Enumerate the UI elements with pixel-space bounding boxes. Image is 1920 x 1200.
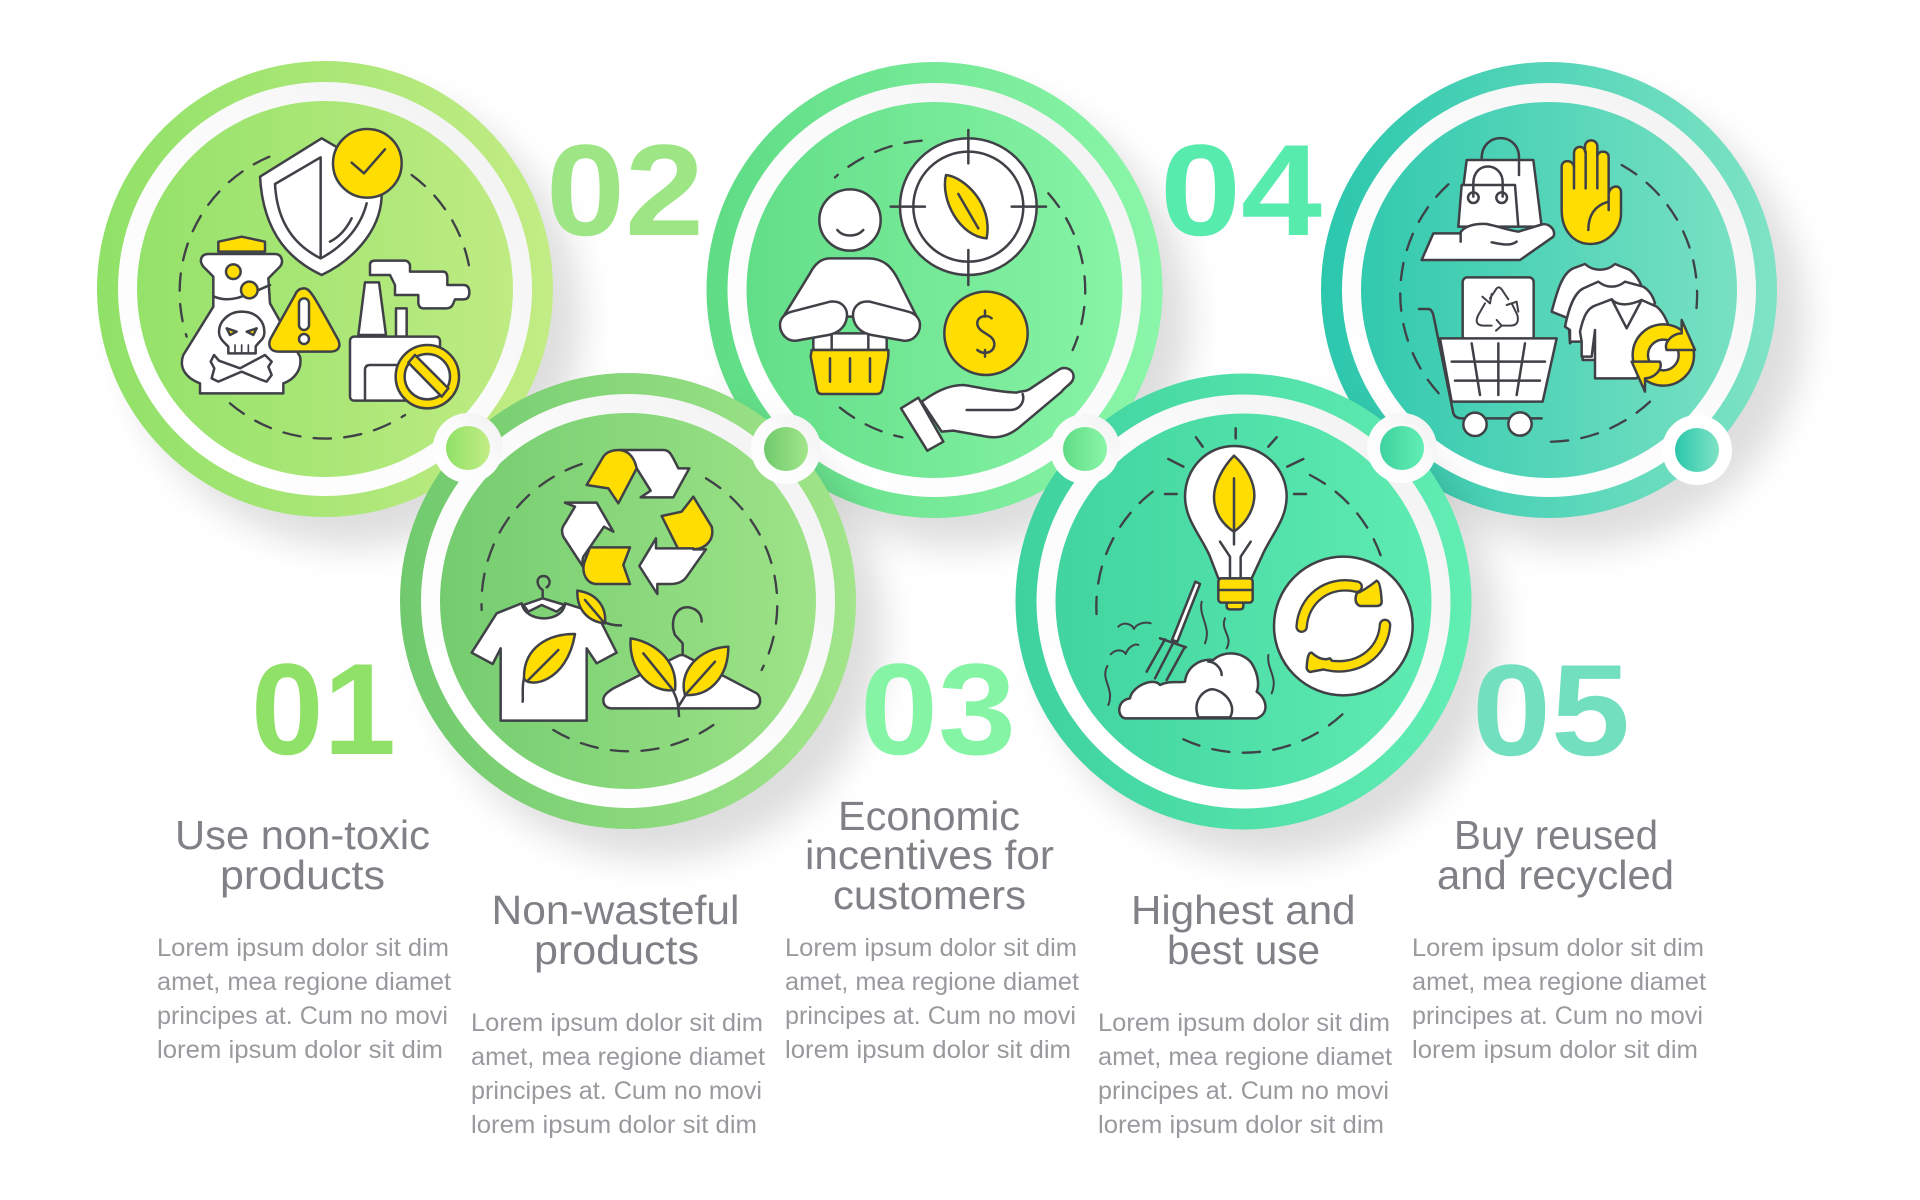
body text: lorem ipsum dolor sit dim: [471, 1111, 757, 1139]
body text: amet, mea regione diamet: [471, 1043, 765, 1071]
panel: step 1 circle: [97, 61, 581, 547]
body text: principes at. Cum no movi: [785, 1002, 1076, 1030]
body text: Lorem ipsum dolor sit dim: [1412, 934, 1704, 962]
body text: principes at. Cum no movi: [471, 1077, 762, 1105]
body text: lorem ipsum dolor sit dim: [157, 1036, 443, 1064]
heading: use non-toxic products: products: [220, 852, 385, 898]
panel: step 5 circle: [1321, 62, 1805, 548]
text block: step 1: [157, 636, 451, 1064]
body text: Lorem ipsum dolor sit dim: [785, 934, 1077, 962]
text block: step 3: [785, 636, 1079, 1064]
icon: shield, poison flask and factory: [180, 129, 471, 439]
heading: buy reused and recycled: Buy reused: [1454, 812, 1658, 858]
heading: economic incentives for customers: Economic: [838, 793, 1020, 839]
heading: non-wasteful products: [492, 887, 740, 973]
body text: lorem ipsum dolor sit dim: [1098, 1111, 1384, 1139]
heading: highest and best use: best use: [1167, 927, 1320, 973]
panel: step 4 circle: [1016, 374, 1499, 859]
text block: step 5: [1412, 637, 1706, 1064]
panel: step 3 circle: [706, 62, 1190, 548]
heading: economic incentives for customers: customers: [833, 872, 1026, 918]
body text: principes at. Cum no movi: [157, 1002, 448, 1030]
heading: highest and best use: [1131, 887, 1356, 973]
body text: [471, 1009, 765, 1139]
icon: leaf lightbulb, compost and refresh arrows: [1096, 428, 1413, 753]
heading: economic incentives for customers: [805, 793, 1054, 918]
body text: [157, 934, 451, 1064]
heading: economic incentives for customers: incentives for: [805, 832, 1054, 878]
body text: amet, mea regione diamet: [785, 968, 1079, 996]
heading: buy reused and recycled: and recycled: [1437, 852, 1674, 898]
number 01: 01: [251, 636, 396, 782]
body text: Lorem ipsum dolor sit dim: [1098, 1009, 1390, 1037]
text block: step 4: [1098, 117, 1392, 1139]
text block: step 2: [471, 117, 765, 1139]
heading: use non-toxic products: [175, 812, 430, 898]
body text: amet, mea regione diamet: [157, 968, 451, 996]
icon: customer, target leaf and coin in hand: [780, 130, 1085, 451]
icon: bags, stop hand, cart and reused shirts: [1400, 138, 1697, 442]
body text: amet, mea regione diamet: [1412, 968, 1706, 996]
heading: highest and best use: Highest and: [1131, 887, 1356, 933]
heading: buy reused and recycled: [1437, 812, 1674, 898]
heading: use non-toxic products: Use non-toxic: [175, 812, 430, 858]
icon: recycle symbol, leaf shirt and hanger: [472, 450, 777, 751]
connector dots: [433, 413, 1732, 485]
number 02: 02: [546, 117, 704, 263]
panel: step 2 circle: [400, 373, 884, 859]
body text: Lorem ipsum dolor sit dim: [471, 1009, 763, 1037]
heading: non-wasteful products: Non-wasteful: [492, 887, 740, 933]
body text: [785, 934, 1079, 1064]
number 05: 05: [1472, 637, 1630, 783]
body text: principes at. Cum no movi: [1412, 1002, 1703, 1030]
body text: lorem ipsum dolor sit dim: [785, 1036, 1071, 1064]
body text: amet, mea regione diamet: [1098, 1043, 1392, 1071]
body text: [1098, 1009, 1392, 1139]
number 03: 03: [860, 636, 1016, 782]
body text: [1412, 934, 1706, 1064]
body text: principes at. Cum no movi: [1098, 1077, 1389, 1105]
number 04: 04: [1160, 117, 1322, 263]
heading: non-wasteful products: products: [534, 927, 699, 973]
body text: Lorem ipsum dolor sit dim: [157, 934, 449, 962]
body text: lorem ipsum dolor sit dim: [1412, 1036, 1698, 1064]
